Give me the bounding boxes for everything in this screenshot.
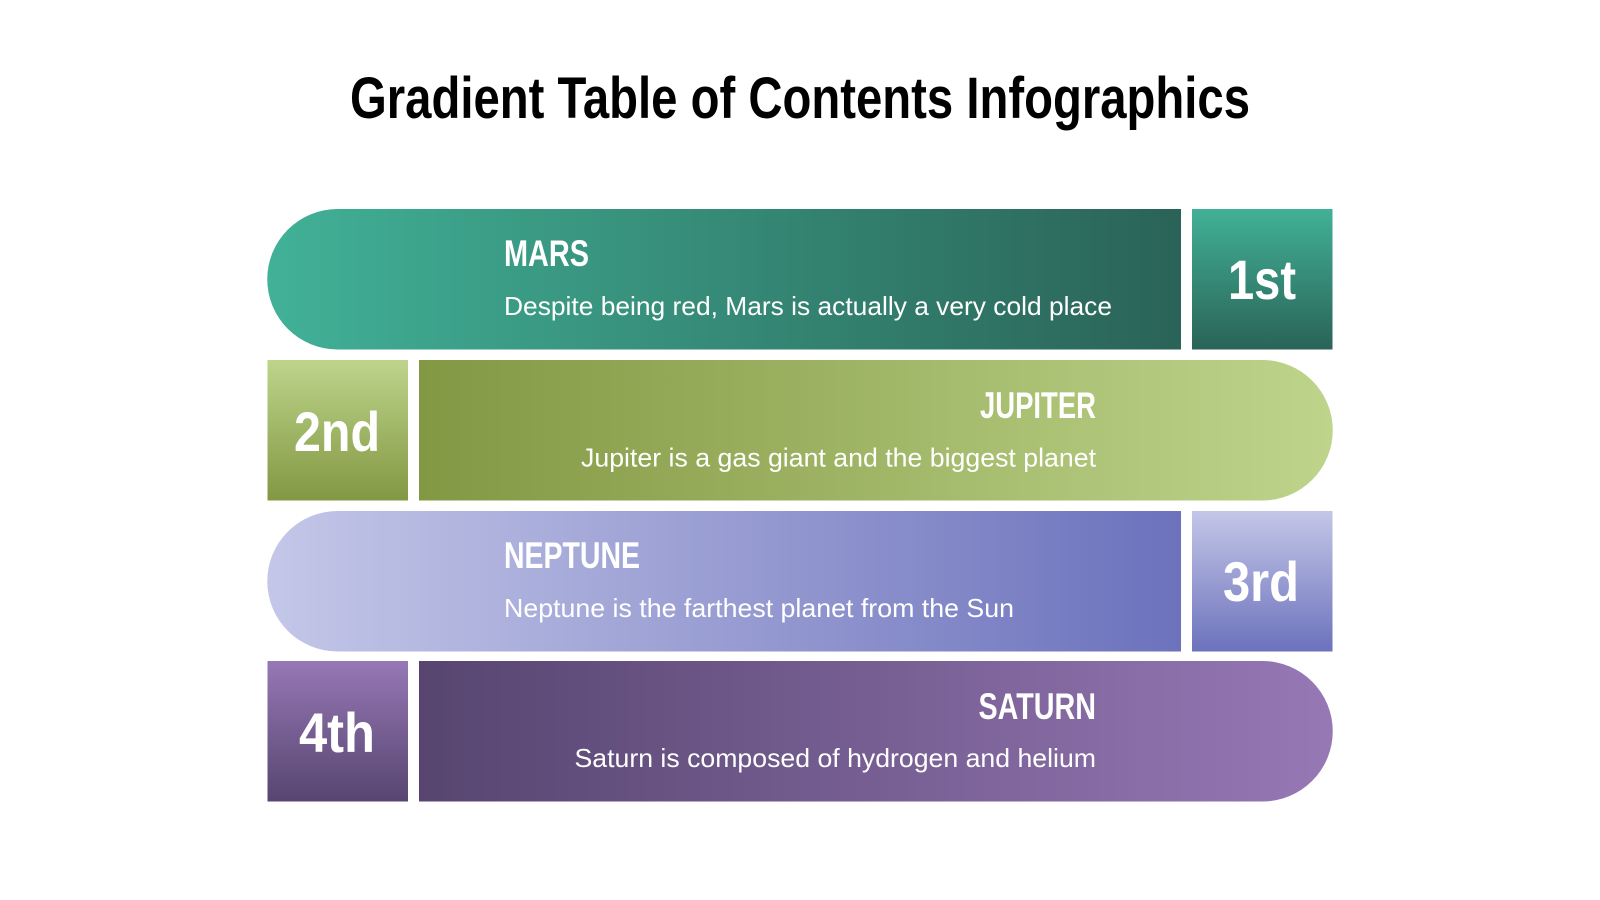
panel: Neptune row [267,511,1332,652]
rank box: 4th [268,661,408,802]
description: Neptune: Neptune is the farthest planet from the Sun [504,593,1014,623]
bar: Saturn [419,661,1333,802]
heading: Neptune: NEPTUNE [504,535,640,576]
title: Gradient Table of Contents Infographics [350,66,1250,131]
bar: Mars [267,209,1181,350]
rank label: 1st: 1st [1228,248,1296,311]
rank box: 1st [1192,209,1332,350]
heading: Saturn: SATURN [978,686,1096,727]
rank label: 2nd: 2nd [294,400,380,463]
heading: Jupiter: JUPITER [980,385,1096,426]
bar: Neptune [267,511,1181,652]
panel: Mars row [267,209,1332,350]
panel: Jupiter row [268,360,1333,500]
description: Mars: Despite being red, Mars is actually a very cold place [504,291,1112,321]
panel: Saturn row [268,661,1333,802]
heading: Mars: MARS [504,233,589,274]
rank label: 3rd: 3rd [1223,550,1299,613]
description: Jupiter: Jupiter is a gas giant and the biggest planet [581,442,1097,472]
bar: Jupiter [419,360,1333,500]
rank box: 3rd [1192,511,1332,652]
rank label: 4th: 4th [299,701,375,764]
description: Saturn: Saturn is composed of hydrogen and helium [574,743,1096,773]
rank box: 2nd [268,360,408,500]
